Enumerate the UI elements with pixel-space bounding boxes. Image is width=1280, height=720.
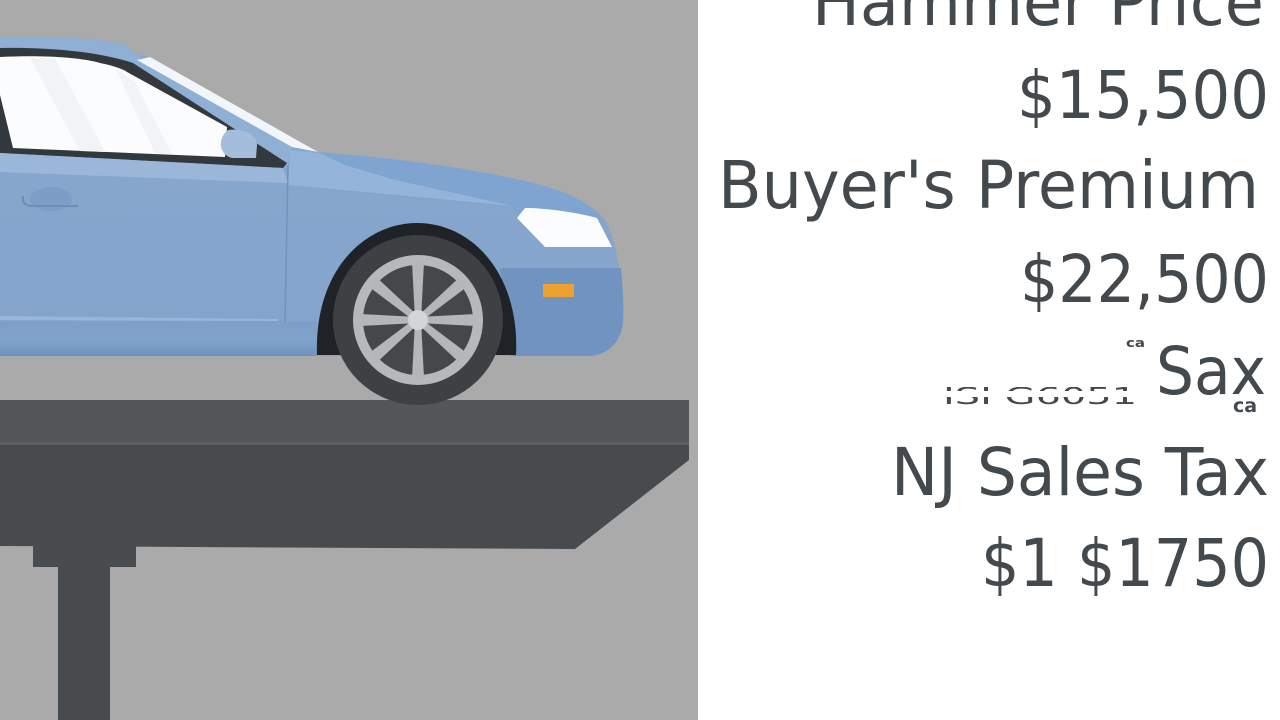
car wheel arch (317, 223, 516, 355)
car sill highlight (0, 316, 278, 321)
car door handle (23, 187, 78, 211)
label: buyer's premium: Buyer's Premium (718, 147, 1259, 224)
car window frame (0, 48, 287, 168)
car roof highlight (0, 37, 292, 165)
illustration: lift (0, 400, 689, 720)
car indicator (543, 284, 574, 297)
label: nj sales tax: NJ Sales Tax (891, 434, 1269, 511)
text: garbled mark below: ca (1233, 395, 1257, 417)
label: tax: Sax (1156, 333, 1266, 410)
car windscreen trim (137, 57, 318, 152)
car door seam (285, 165, 288, 322)
car window reflections (30, 58, 172, 154)
car hood highlight (288, 150, 513, 206)
text: price list (718, 0, 1269, 602)
car upper door panel (0, 153, 288, 183)
car hood (288, 150, 605, 220)
panel: grey backdrop (0, 0, 698, 720)
illustration: car (0, 37, 623, 405)
car wheel (333, 235, 503, 405)
car headlight (517, 208, 612, 247)
car window glass (0, 56, 227, 157)
car body (0, 37, 623, 356)
text: garbled mark above: ca (1126, 336, 1145, 350)
text: garbled fragment: ISI G6051 (943, 384, 1137, 410)
car front lower panel (500, 268, 623, 356)
car mirror (221, 130, 257, 158)
car sill (0, 321, 317, 356)
